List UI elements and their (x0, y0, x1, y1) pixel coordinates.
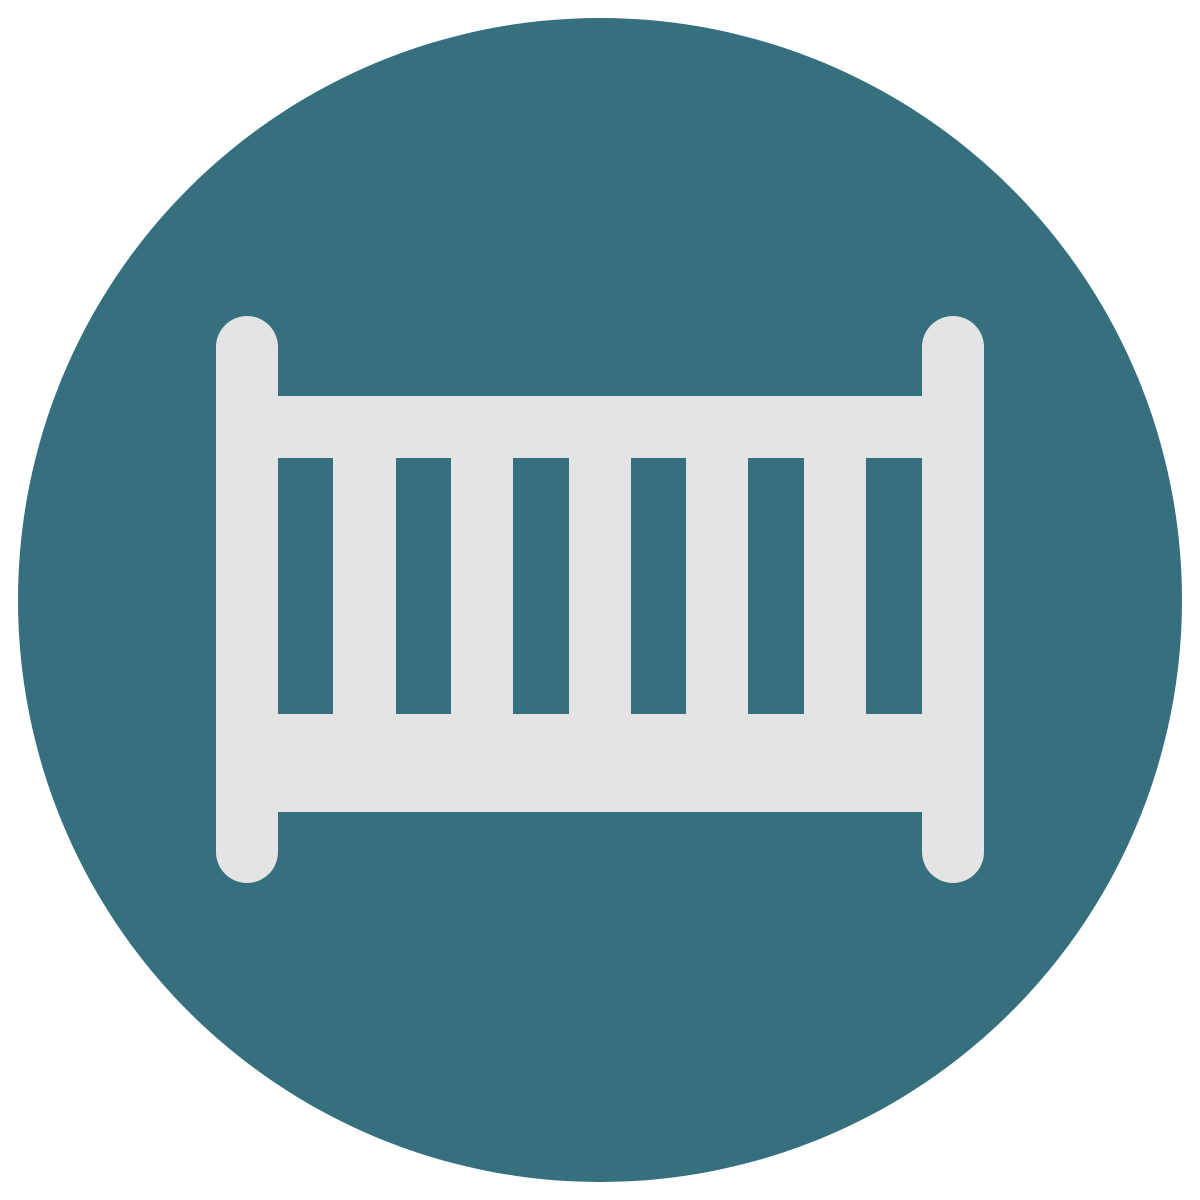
left post (216, 316, 278, 883)
gaps between slats (278, 458, 922, 714)
icon: crib (216, 316, 984, 883)
rails and slats (270, 396, 930, 812)
right post (922, 316, 984, 883)
